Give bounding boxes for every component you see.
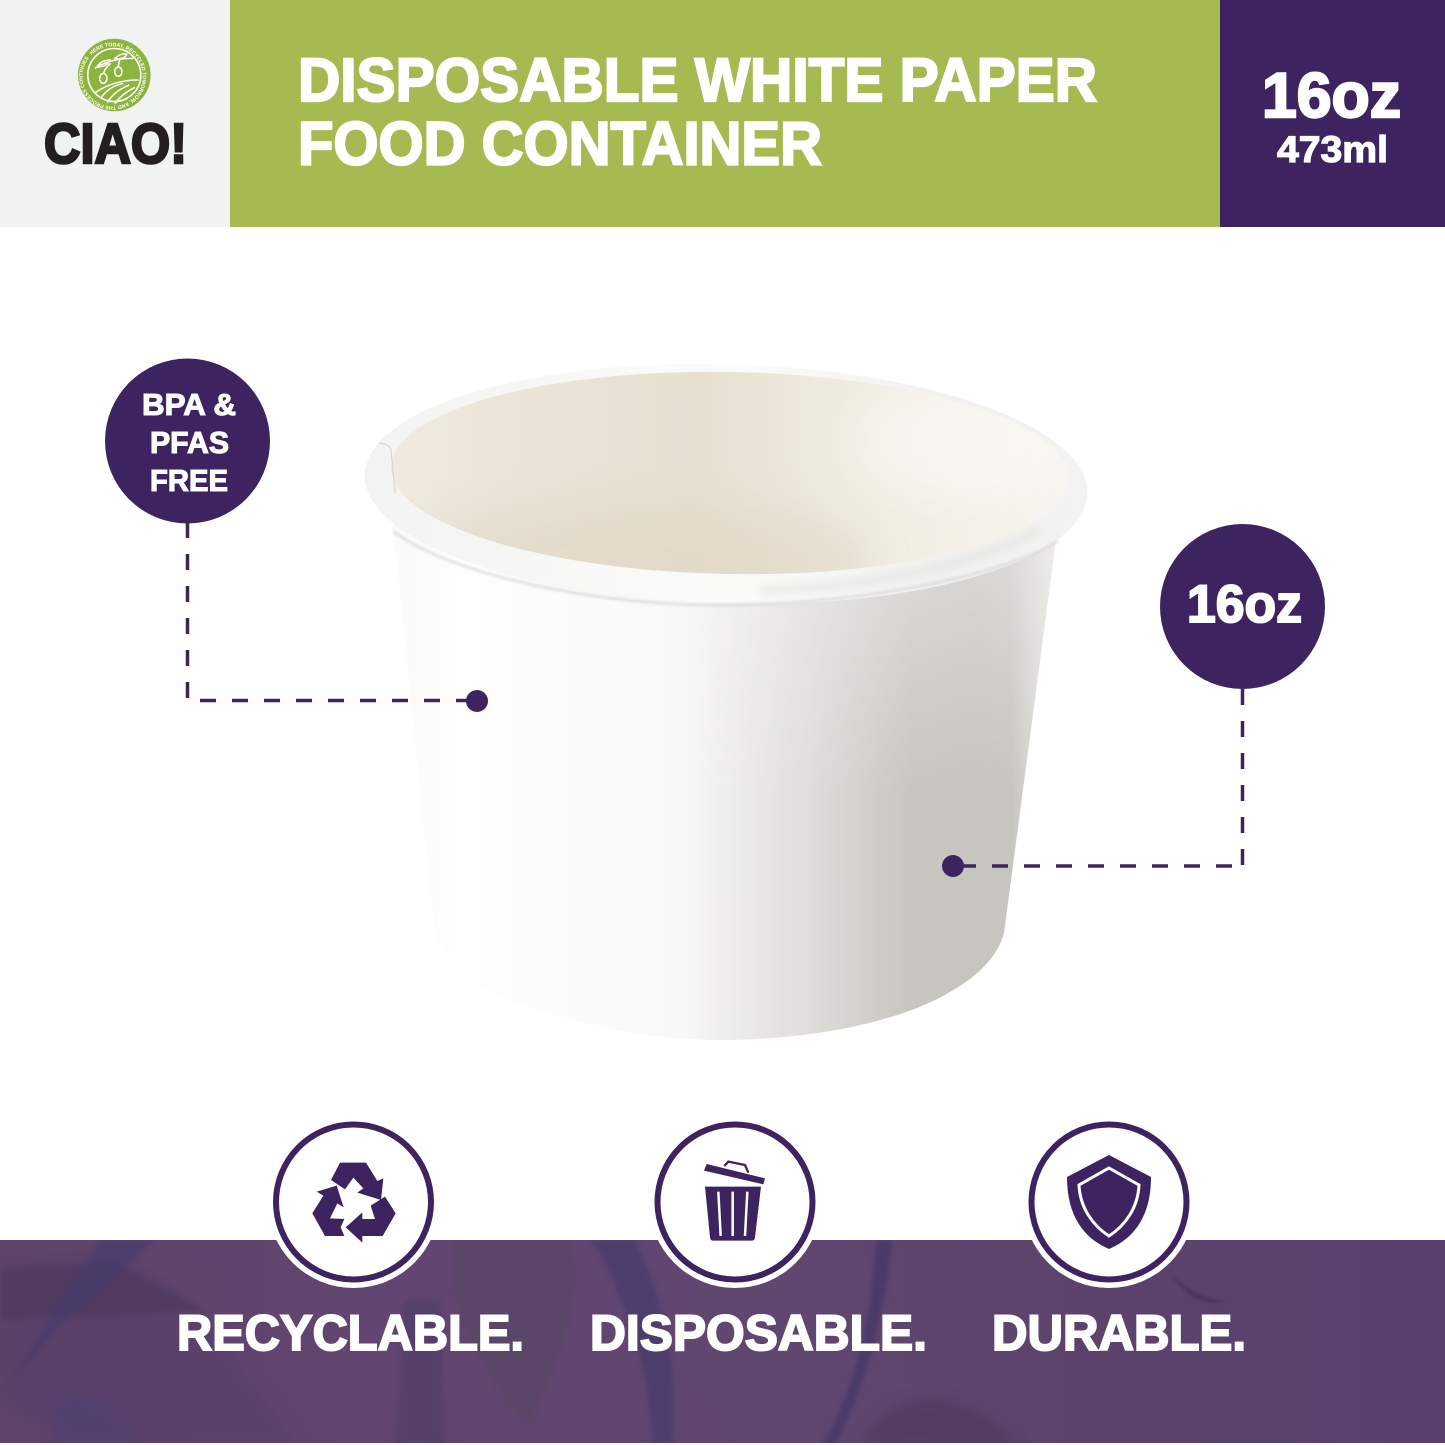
title: DISPOSABLE WHITE PAPER	[298, 46, 1097, 115]
badge text	[142, 388, 236, 498]
badge text: BPA &	[142, 388, 236, 422]
cup rim	[361, 355, 1091, 613]
label: DISPOSABLE.	[590, 1305, 927, 1361]
bottom band with leaf background	[0, 1240, 1445, 1445]
feature: recyclable	[177, 1116, 524, 1361]
header: title panel	[230, 0, 1220, 227]
marker dot	[466, 690, 488, 712]
connector line	[960, 689, 1242, 866]
size in ounces: 16oz	[1262, 61, 1401, 131]
icon: round green olive branch badge: HERE TODAY, RECYCLED TOMORROW, AND THE PROCESS CONTINUES	[79, 42, 146, 110]
logo wordmark: CIAO!	[44, 112, 187, 176]
header: size panel	[1220, 0, 1445, 227]
icon: shield	[1023, 1116, 1195, 1288]
size in millilitres: 473ml	[1277, 129, 1388, 170]
badge text: PFAS	[150, 426, 229, 460]
badge	[1160, 524, 1325, 689]
callout: BPA and PFAS free	[105, 358, 488, 712]
icon: recycling arrows	[268, 1116, 440, 1288]
marker dot	[942, 855, 964, 877]
title	[298, 46, 1097, 178]
connector line	[188, 522, 472, 700]
badge text: FREE	[150, 464, 228, 498]
cup body	[393, 525, 1058, 1040]
product photo: white paper cup	[361, 355, 1091, 1040]
feature: durable	[992, 1116, 1246, 1361]
feature: disposable	[590, 1116, 927, 1361]
cup interior	[389, 366, 1071, 580]
label: DURABLE.	[992, 1305, 1246, 1361]
badge text: 16oz	[1187, 575, 1302, 634]
header: logo panel	[0, 0, 230, 227]
badge	[105, 358, 270, 524]
label: RECYCLABLE.	[177, 1305, 524, 1361]
callout: 16oz capacity	[942, 524, 1325, 877]
icon: trash bin	[649, 1116, 821, 1288]
title: FOOD CONTAINER	[298, 110, 822, 178]
